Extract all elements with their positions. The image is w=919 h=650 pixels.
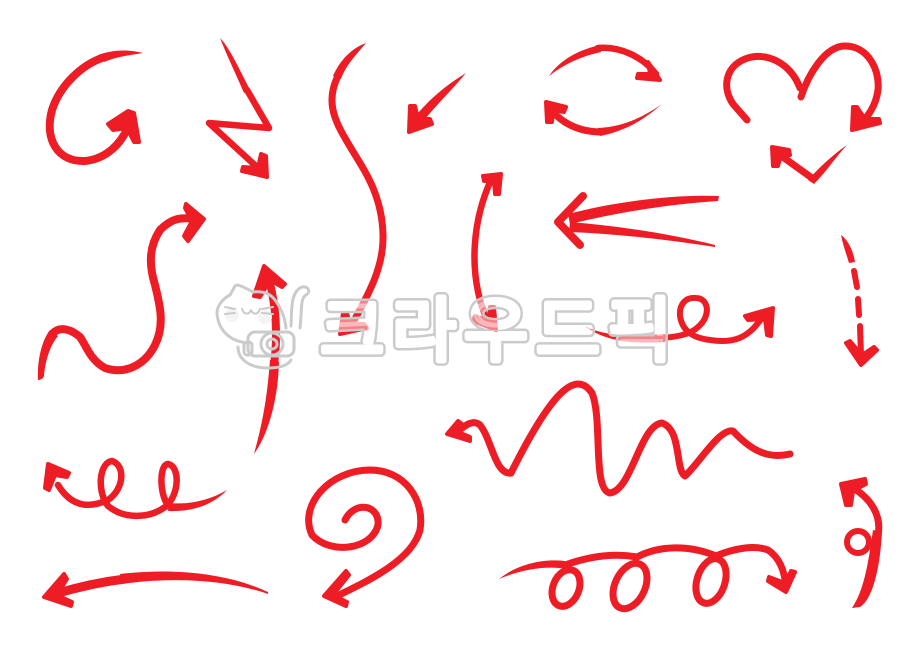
arrow: right vertical with small loop: [841, 479, 882, 608]
arrow: check mark: [772, 145, 847, 184]
arrow: short diagonal: [409, 73, 466, 132]
arrow: long S curve: [332, 43, 383, 334]
arrow: hook curve: [50, 51, 143, 161]
arrow: tall upward: [254, 266, 285, 454]
watermark: camera grip: [244, 342, 252, 355]
watermark: cat blush: [225, 308, 272, 324]
arrow: circular pair, top: [549, 45, 660, 80]
watermark: cat face: [225, 307, 273, 314]
watermark: cat logo: [217, 285, 309, 368]
watermark: camera lens: [261, 333, 283, 355]
arrow: winding S from left: [38, 204, 204, 380]
arrow: spiral: [309, 470, 421, 606]
watermark: wordmark: 크라우드픽: [320, 292, 672, 370]
arrow: long bottom left: [44, 571, 268, 606]
arrow: dashed downward: [841, 235, 877, 365]
arrow: coil with three loops: [499, 548, 795, 614]
arrow: double-headed vertical: [473, 174, 501, 330]
watermark: cat head: [217, 285, 286, 343]
watermark: camera: [248, 332, 294, 356]
watermark: wordmark outline: [318, 292, 668, 366]
arrow: zigzag: [209, 38, 269, 177]
arrow: large left with double shaft: [558, 196, 719, 247]
arrow: circular pair, bottom: [546, 102, 662, 136]
watermark: cat tail: [291, 287, 309, 328]
arrow: big squiggle wave: [447, 384, 790, 493]
arrow: triple curl to the left: [45, 461, 227, 516]
watermark: cat body curve: [238, 347, 291, 368]
arrow: heart loop: [727, 46, 880, 130]
arrow: single loop to the right: [585, 298, 773, 343]
